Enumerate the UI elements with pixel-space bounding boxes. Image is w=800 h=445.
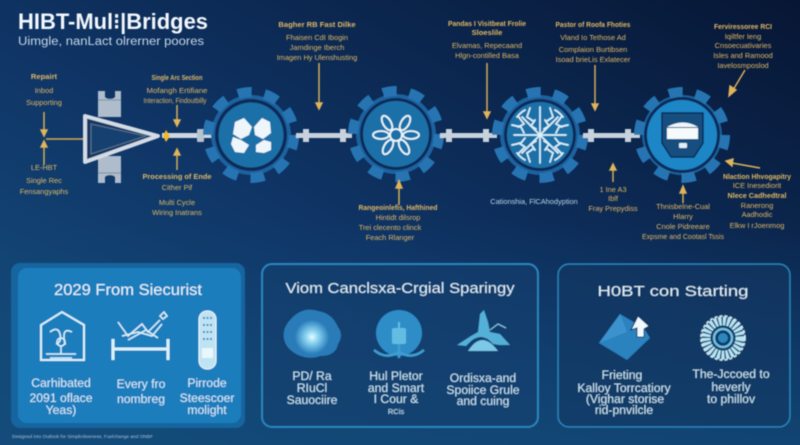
annotation: gear 3 top: Pastor of Roofa Fhoties [556,20,630,29]
annotation: left column: Supporting [26,98,62,107]
annotation: under pipe: 1 Ine A3 [599,185,627,194]
text: column 2: The-Jccoed to [692,367,770,381]
annotation: gear 3 top: Vland Io Tethose Ad [560,33,626,42]
annotation: processing: Cither Pif [162,183,193,192]
annotation: single arc section: Mofangh Ertifiane [146,86,208,95]
annotation: gear 2 to 3 top [448,19,526,118]
text: column 1: RIuCl [297,381,327,395]
footnote: Designed into Outlook for Simplicitiveness, Fuelchange and ONBF [12,434,153,440]
annotation: gear 2 bottom [358,181,438,242]
annotation: gear 4 top right: Cnsoecuativaries [715,41,772,50]
text: column 1: Kalloy Torrcatiory [577,381,672,395]
panel heading: Viom Canclsxa-Crgial Sparingy [286,281,515,297]
text: column 2 [368,369,425,416]
annotation: gear 4 bottom: Hlarry [673,212,693,221]
text: column 1: Carhibated [31,376,91,390]
connector: gear 3 to gear 4 [583,129,640,142]
annotation: gear 1 top: Imagen Hy Ulenshusting [277,53,357,62]
annotation: gear 4 right: Nlaction Hhvogapitry [723,172,792,181]
annotation: processing: Multi Cycle [159,198,195,207]
icon: textured wheel [701,316,745,360]
text: column 3: Pirrode [187,376,227,390]
text: column 1: Yeas) [46,403,76,417]
panel heading: H0BT con Starting [598,283,748,300]
gear 4 [639,92,725,178]
annotation: gear 4 top right: Isles and Ramood [713,51,773,60]
annotation: left column [20,72,83,196]
connector: gear 1 to gear 2 [296,129,352,142]
icon: bed with bridge [113,312,168,360]
connector: bridge to gear 1 [162,129,212,142]
annotation: single arc section: Interaction, Findoutbilly [144,96,207,105]
annotation: processing: Processing of Ende [142,172,212,181]
annotation: gear 4 right: Aadhodic [742,210,773,219]
panel: sparing [262,264,538,427]
text: column 1: rid-pnvilcle [595,403,653,417]
annotation: gear 2 bottom: Rangeoinlefis, Hafthined [358,203,438,212]
icon: house shield [41,312,84,360]
annotation: under pipe [588,164,638,213]
text: column 2: Every fro [117,377,166,391]
text: column 2 [692,367,770,406]
annotation: gear 3 top [556,20,631,110]
annotation: gear 4 top right: Ferviressoree RCI [714,22,772,31]
text: column 1 [577,368,672,417]
text: column 3 [446,371,520,408]
text: column 2: Hul Pletor [369,369,423,383]
annotation: gear 4 right: Elkw I rJoenmog [730,221,784,230]
panel: starting [558,264,790,427]
icon: device [662,113,703,157]
text: column 1: 2091 oflace [29,391,93,405]
annotation: under pipe: Iblf [608,194,619,203]
text: column 2 [117,377,166,406]
annotation: gear 2 bottom: Hintidt dilsrop [376,213,420,222]
annotation: left column: Single Rec [26,176,62,185]
text: column 2: nombreg [117,392,165,406]
title: HIBT-Mul⁝|Bridges [18,9,208,34]
annotation: gear 4 top right: Iavelosmposlod [717,61,769,70]
annotation: left column: Fensangyaphs [20,187,69,196]
annotation: gear 1 top: Bagher RB Fast Dilke [278,20,356,29]
icon: hexagon with arrow [599,314,650,360]
annotation: gear 3 top: Complaion Burtibsen [559,45,627,54]
text: column 3: Ordisxa-and [450,371,516,385]
icon: flower [373,114,419,156]
text: column 1: Sauociire [287,393,338,407]
text: column 2: I Cour & [374,392,418,406]
text: column 3: molight [187,403,227,417]
annotation: single arc section [144,73,208,126]
text: column 1: Frieting [602,368,642,382]
annotation: left column: Repairt [31,72,58,81]
gear 1 [208,92,294,178]
annotation: gear 2 bottom: Feach Rlanger [366,233,415,242]
annotation: gear 4 right: ICE Inesediorit [733,181,781,190]
text: column 1 [287,369,338,407]
text: column 3: Steescoer [180,391,234,405]
annotation: gear 1 top [277,20,357,109]
annotation: gear 4 top right: Iqiltfer Ieng [725,32,761,41]
icon: brain network [512,107,568,163]
text: column 3 [180,376,234,417]
text: column 1: (Vighar storise [586,392,664,406]
icon: capsule [199,311,216,369]
annotation: gear 2 to 3 top: Pandas I Visitbeat Frolie [448,19,526,28]
text: column 3: and cuing [457,394,509,408]
text: column 1: PD/ Ra [292,369,332,383]
annotation: single arc section: Single Arc Section [152,73,203,82]
text: column 3: Spoiice Grule [446,383,520,397]
annotation: gear 4 bottom: Cnole Pidreeare [656,222,710,231]
icon: glowing cloud [284,310,341,358]
annotation: gear 1 top: Fhaisen CdI Ibogin [286,33,348,42]
annotation: gear 3 top: Isoad brieLis Exlatecer [556,55,631,64]
annotation: gear 4 top right [713,22,773,96]
annotation: left column: LE-HBT [31,163,58,172]
text: column 1 [29,376,93,417]
subtitle: Uimgle, nanLact olrerner poores [18,36,204,48]
annotation: gear 2 to 3 top: Sloeslile [472,28,502,37]
annotation: gear 4 right [723,159,792,230]
annotation: gear 4 right: Nlece Cadhedtral [728,191,786,200]
annotation: left column: Inbod [35,86,53,95]
text: column 2: RCis [388,407,404,416]
annotation: processing [142,149,212,217]
annotation: under pipe: Fray Prepydiss [588,204,638,213]
panel heading: 2029 From Siecurist [54,282,203,299]
annotation: gear 2 to 3 top: Hlgn-contilled Basa [455,51,520,60]
text: column 2: and Smart [368,381,425,395]
text: column 2: to phillov [707,392,756,406]
panel: security [11,263,245,428]
annotation: gear 4 right: Ranerong [741,201,773,210]
annotation: gear 4 bottom: Thnisbelne-Cual [656,202,710,211]
label: gear 3 caption: Cationshia, FlCAhodyption [490,197,578,206]
gear 2 [353,91,439,177]
text: column 2: heverly [711,380,752,394]
annotation: gear 1 top: Jamdinge Iberch [290,43,344,52]
annotation: gear 4 bottom [642,186,724,241]
annotation: gear 4 bottom: Expsme and Cootasl Tssis [642,232,724,241]
icon: crossed hexagons [231,118,271,153]
annotation: gear 2 to 3 top: Elvamas, Repecaand [452,41,522,50]
icon: lantern globe [374,310,424,358]
connector: gear 2 to gear 3 [440,129,497,142]
icon: dome [457,310,510,351]
icon: triangular bridge component [85,91,158,183]
annotation: processing: Wiring Inatrans [152,208,202,217]
gear 3 [497,92,583,178]
annotation: gear 2 bottom: Trei clecento clinck [359,223,422,232]
